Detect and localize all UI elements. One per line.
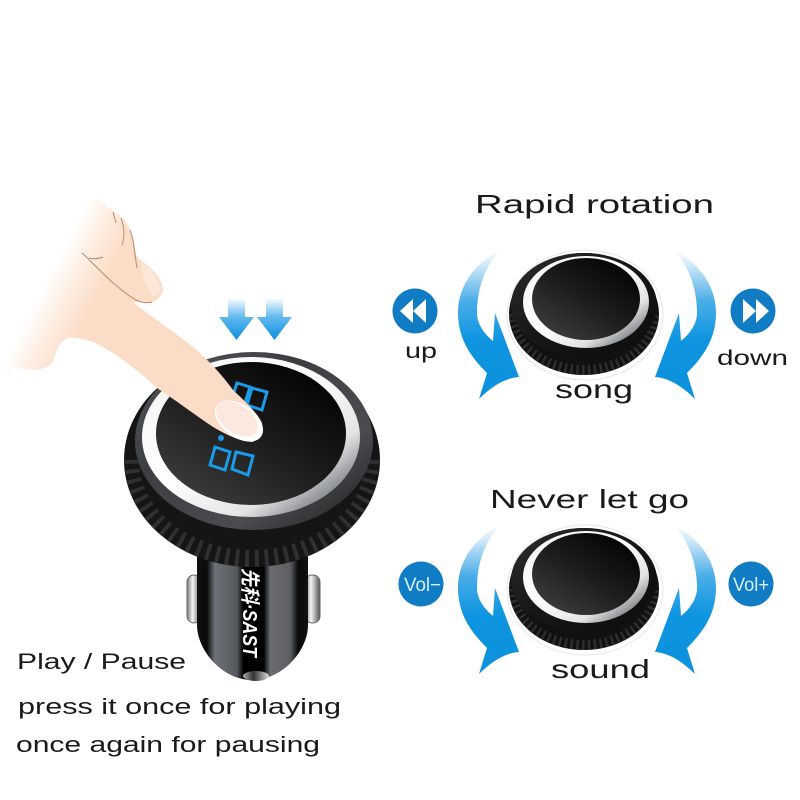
press arrows (219, 298, 292, 340)
car charger (124, 352, 380, 681)
index finger, hand and thumb (0, 200, 262, 442)
song knob (507, 250, 663, 380)
icon: volume up: Vol+ (733, 575, 769, 596)
label: play pause: Play / Pause (17, 649, 186, 674)
arrow: volume right (655, 525, 716, 674)
arrow: rotate left (458, 250, 519, 399)
hand pressing knob (0, 200, 271, 450)
sound knob (507, 525, 663, 655)
icon: previous (392, 288, 438, 334)
charger body (197, 555, 308, 680)
label: down: down (717, 347, 788, 370)
label: up: up (405, 340, 437, 363)
brand text: 先科·SAST (238, 568, 260, 659)
icon: volume down (398, 562, 444, 606)
charger tip (243, 671, 269, 681)
arrow: rotate right (655, 250, 716, 399)
finger nail (207, 392, 271, 450)
once again text: once again for pausing (16, 732, 320, 757)
press once text: press it once for playing (18, 694, 341, 719)
icon: volume down: Vol− (404, 575, 441, 596)
digital display (210, 383, 267, 475)
charger ears (187, 575, 320, 623)
thumb crease lines (82, 212, 152, 303)
label: sound: sound (551, 654, 650, 684)
instructions (16, 649, 341, 757)
heading: rapid rotation: Rapid rotation (475, 189, 714, 219)
thumb nail (141, 262, 161, 296)
icon: next (730, 288, 776, 334)
heading: never let go: Never let go (490, 484, 689, 514)
icon: volume up (728, 562, 774, 606)
main knob (124, 352, 380, 567)
arrow: volume left (458, 525, 519, 674)
label: song: song (555, 374, 633, 404)
